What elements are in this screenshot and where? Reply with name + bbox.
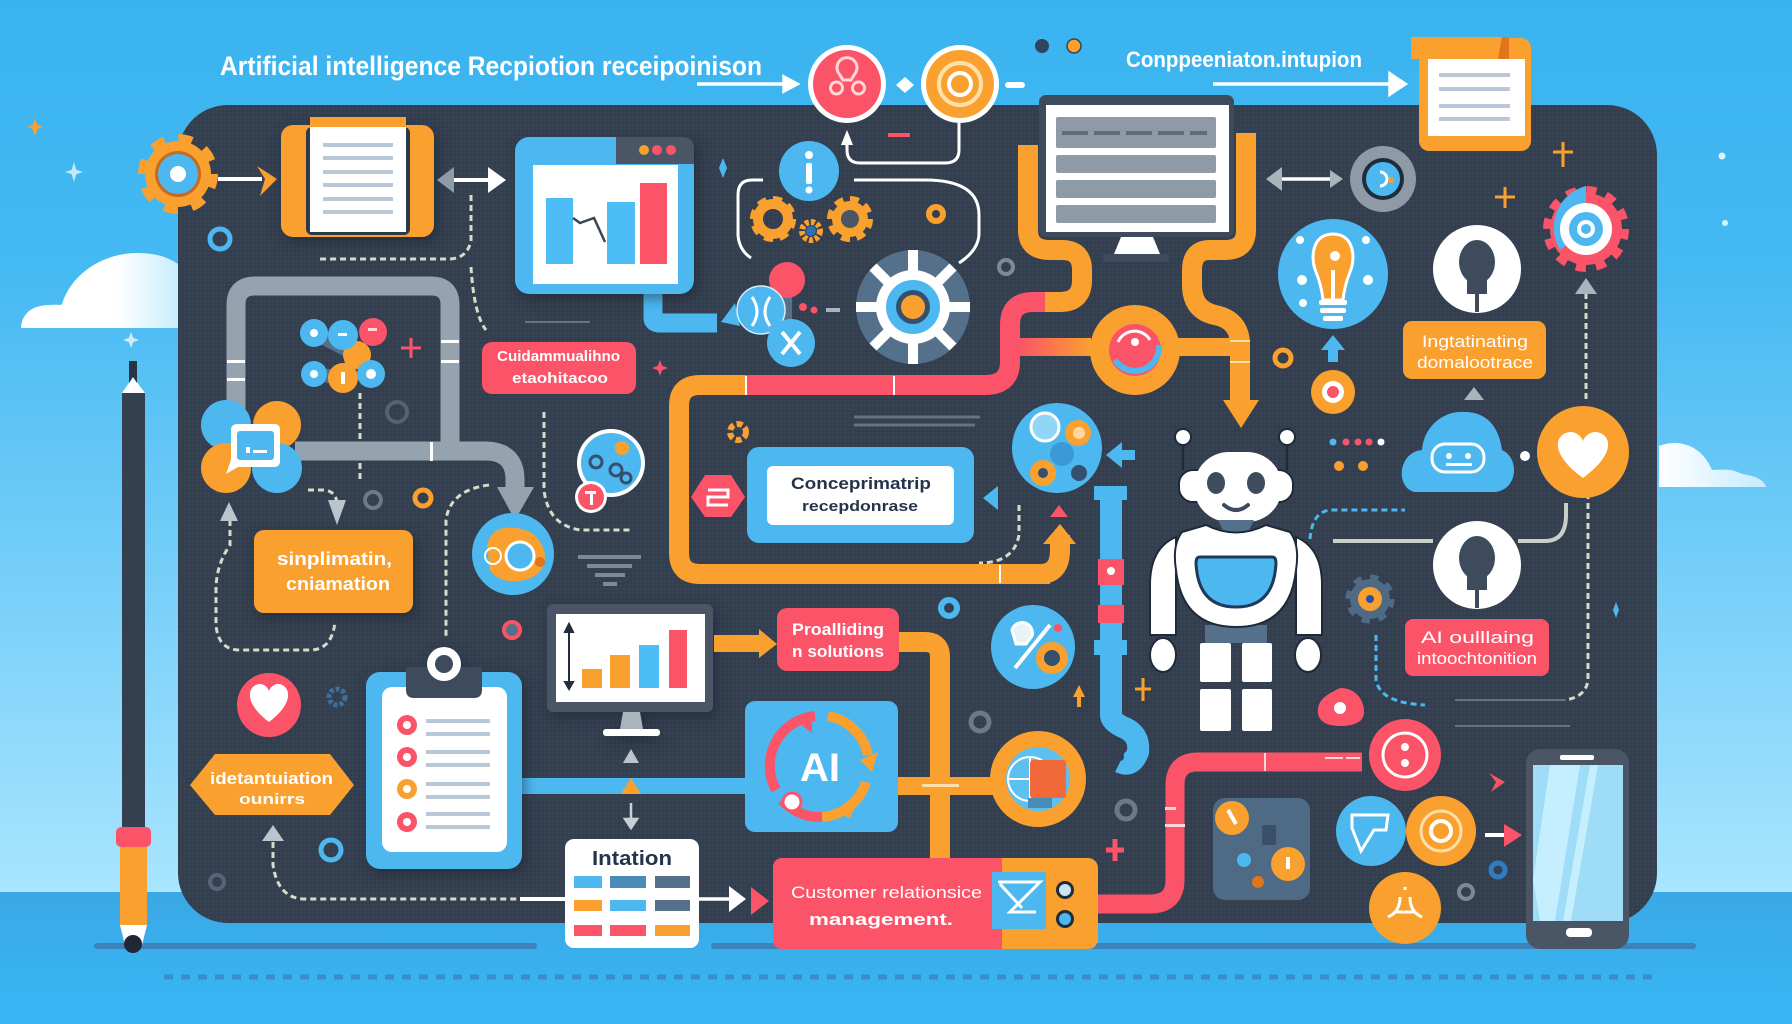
antenna: right	[1279, 429, 1295, 470]
label: red AI outlining: AI oulllaing	[1421, 628, 1534, 647]
robot eyes	[1207, 472, 1265, 494]
cloud: right	[1659, 443, 1766, 487]
red star	[652, 360, 668, 376]
icon: blue cluster bubble	[1012, 403, 1102, 493]
icon: left orange gear	[143, 139, 213, 209]
icon: tools bubble cluster	[721, 262, 840, 367]
arrow: blue to cluster	[1106, 442, 1135, 468]
arrow: monitor to solutions	[714, 629, 777, 658]
panel: AI cycle: AI	[800, 746, 840, 790]
icon: red blob	[1318, 688, 1364, 726]
label: orange simplification: cniamation	[286, 574, 390, 594]
icon: light bulb	[1278, 219, 1388, 329]
icon: blue cloud	[1402, 412, 1514, 492]
icon: orange network circle	[1369, 872, 1441, 944]
blue vertical pipe with hook	[1094, 486, 1138, 764]
table card	[565, 839, 699, 948]
icon: big settings gear	[856, 250, 970, 364]
title: Artificial intelligence Recpiotion receipoinison	[220, 51, 762, 81]
red chevron	[1489, 773, 1505, 792]
sparkles on sky	[27, 118, 1728, 348]
background floor	[0, 892, 1792, 1024]
label: orange hexagon	[190, 754, 354, 815]
arrow: double headed	[437, 167, 506, 193]
robot neck	[1218, 520, 1254, 537]
gray triangle	[1464, 387, 1484, 400]
label: red providing solutions: Proalliding	[792, 620, 884, 639]
robot torso	[1175, 525, 1297, 627]
icon: red diamond	[691, 475, 745, 517]
red to orange connector	[1019, 338, 1091, 356]
icon: blue chat bubble	[1336, 796, 1406, 866]
robot ears	[1179, 470, 1293, 502]
red pipe CRM to red node	[1098, 762, 1362, 904]
info circle	[779, 141, 839, 201]
small ring	[210, 229, 230, 249]
icon: orange magnifier bubble	[472, 513, 554, 595]
label: orange simplification	[254, 530, 413, 613]
icon: diamond connector	[896, 77, 914, 93]
small orange ring near gear	[929, 207, 943, 221]
icon: orange target	[1406, 796, 1476, 866]
main orange and red pipe loop	[679, 133, 1246, 574]
arrow: table to CRM	[699, 886, 769, 915]
icon: person top	[1433, 225, 1521, 313]
white dot	[1520, 451, 1530, 461]
icon: funnel lines	[578, 555, 641, 586]
icon: red heart	[237, 673, 301, 737]
dashed connectors upper left	[216, 195, 1588, 899]
heading: right: Conppeeniaton.intupion	[1126, 47, 1362, 72]
icon: red node	[808, 45, 886, 123]
arrow: dashed gray up to gear	[1575, 278, 1597, 294]
dotted footer line	[164, 974, 1656, 980]
floor shadow bars	[94, 943, 1696, 949]
icon: globe node	[990, 731, 1086, 827]
robot head	[1194, 452, 1282, 522]
panel: customer relationship management	[773, 858, 1098, 949]
arrow head on loop	[841, 130, 853, 145]
robot hips	[1205, 625, 1267, 643]
arrow: gray up to hexagon	[262, 825, 284, 841]
icon: blue glass circle	[575, 429, 645, 513]
small orange blob	[730, 424, 746, 440]
arrow: to document	[1213, 74, 1405, 94]
label: orange simplification: sinplimatin,	[277, 549, 392, 569]
icon: bar chart monitor	[547, 604, 713, 736]
label: red providing solutions	[777, 608, 899, 671]
gray arrow up small	[220, 502, 238, 521]
icon: phone	[1526, 749, 1629, 949]
pipe ticks	[1165, 753, 1360, 827]
top status dots	[1035, 39, 1081, 53]
arrow: upward orange loop head	[1043, 524, 1076, 544]
orange connector right	[1170, 338, 1240, 356]
icon: gray ring lens	[1350, 146, 1416, 212]
icon: red dots node	[1369, 719, 1441, 791]
robot hands	[1150, 638, 1321, 672]
pencil	[116, 361, 151, 953]
gray pipe arrow	[497, 487, 534, 520]
pipe loop ticks	[745, 376, 1001, 583]
icon: map tile	[1213, 798, 1310, 900]
label: blue partnership panel: Conceprimatrip	[791, 474, 931, 493]
icon: molecule cluster	[300, 318, 387, 393]
label: orange integrating	[1403, 321, 1546, 379]
arrow: gear to document	[218, 166, 277, 196]
icon: slate gear	[1349, 578, 1391, 620]
label: red customer: etaohitacoo	[512, 370, 608, 387]
robot arms	[1150, 537, 1322, 635]
red triangle above arrow	[1050, 505, 1068, 517]
red dash	[888, 133, 910, 137]
panel: monitor	[1039, 95, 1234, 262]
connector lines to person	[1333, 503, 1566, 541]
label: orange hexagon: ounirrs	[239, 791, 305, 808]
icon: orange gears row	[754, 200, 869, 240]
small rings	[210, 840, 341, 889]
arrow: blue up to bulb	[1321, 335, 1345, 362]
panel: AI cycle	[745, 701, 898, 832]
panel: customer relationship management: management.	[809, 910, 953, 929]
gray arrow down small	[328, 500, 346, 525]
label: orange integrating: domalootrace	[1417, 353, 1533, 372]
arrow: title to red node	[697, 77, 797, 91]
white outlined loops	[738, 123, 979, 263]
icon: blue bubble below	[991, 605, 1075, 689]
gray connector lines	[525, 322, 1570, 726]
label: orange hexagon: idetantuiation	[210, 769, 333, 788]
robot legs	[1200, 643, 1272, 731]
connector ticks	[1230, 340, 1250, 363]
icon: speech bubble cluster	[201, 400, 302, 493]
robot chest screen	[1196, 557, 1276, 607]
arrows beside blue pipe	[621, 749, 641, 828]
icon: orange target node	[921, 45, 999, 123]
icon: clipboard checklist	[366, 647, 522, 869]
small blue gear	[329, 689, 345, 705]
label: blue partnership panel	[747, 447, 974, 543]
orange pipe AI to globe	[898, 777, 993, 795]
robot	[1150, 429, 1322, 731]
panel: chart window	[515, 137, 694, 294]
pipe ticks	[227, 340, 459, 461]
arrow: orange down to robot	[1223, 400, 1259, 428]
gray pipe network	[236, 286, 515, 492]
label: red customer	[482, 342, 636, 394]
icon: central orange node	[1090, 305, 1180, 395]
label: red AI outlining	[1405, 619, 1549, 676]
icon: top right document	[1411, 37, 1531, 151]
cloud: left	[21, 253, 178, 328]
arrow: to phone	[1485, 824, 1522, 847]
icon: small orange target	[1311, 370, 1355, 414]
icon: person lower	[1433, 521, 1521, 609]
label: red AI outlining: intoochtonition	[1417, 649, 1537, 668]
panel: customer relationship management: Customer relationsice	[791, 883, 982, 902]
label: red customer: Cuidammualihno	[497, 348, 620, 365]
label: red providing solutions: n solutions	[792, 642, 884, 661]
decorative small icons	[719, 142, 1619, 899]
arrow: blue left small	[983, 486, 998, 510]
arrow: double headed right of monitor	[1266, 167, 1343, 191]
icon: multicolor gear	[1548, 186, 1624, 267]
blue pipe clipboard to AI	[522, 778, 745, 794]
pipe tick	[922, 784, 959, 787]
table card: Intation	[592, 848, 672, 870]
main dark panel	[178, 105, 1657, 923]
orange pipe from solutions	[896, 642, 940, 860]
icon: orange heart	[1537, 406, 1629, 498]
antenna: left	[1175, 429, 1191, 470]
icon: small rings lower left	[365, 402, 431, 508]
dots row	[1330, 438, 1384, 471]
robot smile	[1224, 505, 1248, 510]
connector dash	[1005, 82, 1025, 88]
white connector to table	[520, 897, 570, 901]
blue dashed connectors right	[1310, 510, 1425, 705]
label: orange integrating: Ingtatinating	[1422, 332, 1528, 351]
small red plus	[401, 338, 421, 358]
small red ring	[504, 622, 520, 638]
label: blue partnership panel: recepdonrase	[802, 498, 918, 515]
icon: document with orange frame	[281, 117, 434, 237]
blue pipe from chart window	[653, 285, 717, 323]
small orange ring	[1275, 350, 1291, 366]
